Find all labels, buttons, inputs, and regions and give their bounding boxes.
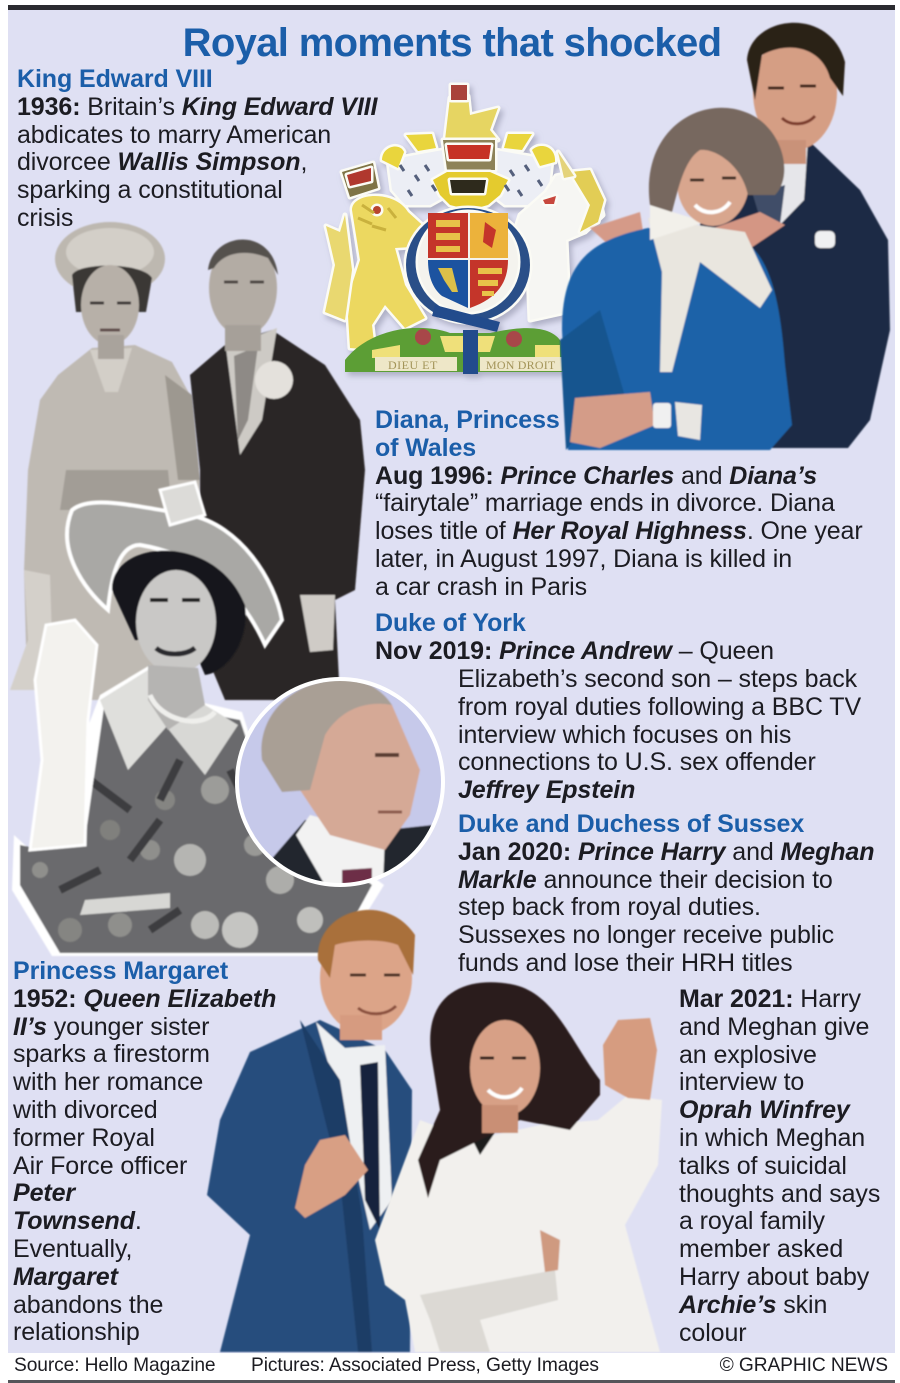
panel: Princess Margaret: former Royal bbox=[13, 1124, 155, 1152]
panel: March 2021 interview: Oprah Winfrey bbox=[679, 1096, 850, 1124]
compartment bbox=[345, 328, 563, 372]
footer: copyright: © GRAPHIC NEWS bbox=[720, 1355, 888, 1376]
panel: Princess Margaret: Peter bbox=[13, 1179, 75, 1207]
top lion bbox=[445, 96, 498, 140]
panel: March 2021 interview: in which Meghan bbox=[679, 1124, 865, 1152]
panel: King Edward VIII: King Edward VIII bbox=[17, 65, 213, 93]
royal crown bbox=[443, 140, 495, 170]
panel: Diana, Princess of Wales: “fairytale” marriage ends in divorce. Diana bbox=[375, 489, 835, 517]
panel: Princess Margaret: Air Force officer bbox=[13, 1152, 187, 1180]
panel: King Edward VIII: abdicates to marry American bbox=[17, 121, 331, 149]
panel: Princess Margaret: with her romance bbox=[13, 1068, 203, 1096]
photo: Princess Margaret bbox=[12, 482, 384, 956]
panel: Princess Margaret: abandons the bbox=[13, 1291, 163, 1319]
panel: Princess Margaret: relationship bbox=[13, 1318, 140, 1346]
photo: Prince Charles and Diana bbox=[560, 23, 890, 450]
panel: March 2021 interview: interview to bbox=[679, 1068, 804, 1096]
panel: Diana, Princess of Wales: Aug 1996: Prince Charles and Diana’s bbox=[375, 462, 817, 490]
panel: March 2021 interview: Archie’s skin bbox=[679, 1291, 827, 1319]
footer: source: Source: Hello Magazine bbox=[14, 1355, 216, 1376]
helm bbox=[433, 172, 508, 210]
panel: Duke of York body: Jeffrey Epstein bbox=[458, 776, 635, 804]
panel: Duke and Duchess of Sussex bbox=[458, 810, 874, 977]
panel: March 2021 interview: colour bbox=[679, 1319, 746, 1347]
panel: Princess Margaret bbox=[13, 957, 276, 1346]
panel: Princess Margaret: Margaret bbox=[13, 1263, 118, 1291]
panel: Duke of York body: interview which focuses on his bbox=[458, 721, 791, 749]
panel: King Edward VIII: sparking a constitutional bbox=[17, 176, 283, 204]
panel: Duke of York heading and lead: Nov 2019: Prince Andrew – Queen bbox=[375, 637, 774, 665]
photo: Meghan Markle bbox=[375, 982, 662, 1352]
panel: Princess Margaret: Townsend. bbox=[13, 1207, 142, 1235]
panel: March 2021 interview: Mar 2021: Harry bbox=[679, 985, 861, 1013]
panel: King Edward VIII: crisis bbox=[17, 204, 73, 232]
top rule bbox=[8, 5, 895, 10]
panel: Duke and Duchess of Sussex: Markle announce their decision to bbox=[458, 866, 833, 894]
panel: Duke and Duchess of Sussex: step back from royal duties. bbox=[458, 893, 761, 921]
panel: Duke and Duchess of Sussex: Jan 2020: Prince Harry and Meghan bbox=[458, 838, 874, 866]
panel: March 2021 interview: an explosive bbox=[679, 1041, 817, 1069]
icon: royal coat of arms: DIEU ET bbox=[388, 358, 438, 372]
panel: Princess Margaret: Princess Margaret bbox=[13, 957, 228, 985]
panel: Princess Margaret: 1952: Queen Elizabeth bbox=[13, 985, 276, 1013]
motto ribbon bbox=[375, 357, 457, 371]
panel: Duke of York body: from royal duties following a BBC TV bbox=[458, 693, 861, 721]
title: Royal moments that shocked bbox=[183, 21, 721, 65]
panel: Princess Margaret: II’s younger sister bbox=[13, 1013, 209, 1041]
photo: Prince Andrew portrait bbox=[235, 677, 450, 890]
panel: Diana, Princess of Wales: a car crash in Paris bbox=[375, 573, 587, 601]
panel: Duke of York body: Elizabeth’s second son – steps back bbox=[458, 665, 857, 693]
panel: March 2021 interview: a royal family bbox=[679, 1207, 825, 1235]
panel: Diana, Princess of Wales: of Wales bbox=[375, 434, 476, 462]
panel: Duke and Duchess of Sussex: Sussexes no longer receive public bbox=[458, 921, 834, 949]
lion supporter bbox=[347, 196, 430, 350]
panel: Duke of York heading and lead: Duke of York bbox=[375, 609, 526, 637]
panel: Diana, Princess of Wales: loses title of Her Royal Highness. One year bbox=[375, 517, 863, 545]
bottom rule bbox=[8, 1380, 895, 1383]
photo: Prince Harry bbox=[207, 910, 415, 1352]
icon: royal coat of arms bbox=[325, 85, 604, 374]
panel: Princess Margaret: Eventually, bbox=[13, 1235, 132, 1263]
panel: March 2021 interview: and Meghan give bbox=[679, 1013, 869, 1041]
footer: pictures credit: Pictures: Associated Press, Getty Images bbox=[251, 1355, 599, 1376]
panel: Diana, Princess of Wales: later, in August 1997, Diana is killed in bbox=[375, 545, 792, 573]
panel: March 2021 interview bbox=[678, 985, 880, 1347]
panel: March 2021 interview: thoughts and says bbox=[679, 1180, 880, 1208]
panel: Duke of York heading and lead bbox=[375, 609, 774, 665]
icon: royal coat of arms: MON DROIT bbox=[486, 358, 556, 372]
panel: Diana, Princess of Wales bbox=[375, 406, 863, 601]
panel: Duke of York body: connections to U.S. sex offender bbox=[458, 748, 816, 776]
panel: March 2021 interview: Harry about baby bbox=[679, 1263, 869, 1291]
panel: Princess Margaret: with divorced bbox=[13, 1096, 158, 1124]
panel: Princess Margaret: sparks a firestorm bbox=[13, 1040, 210, 1068]
panel: Duke and Duchess of Sussex: funds and lose their HRH titles bbox=[458, 949, 793, 977]
panel: King Edward VIII: divorcee Wallis Simpson, bbox=[17, 148, 307, 176]
panel: March 2021 interview: member asked bbox=[679, 1235, 843, 1263]
mantling bbox=[325, 85, 604, 350]
panel: King Edward VIII bbox=[17, 65, 378, 232]
panel: Duke of York body bbox=[458, 665, 861, 804]
photo: Wallis Simpson bbox=[10, 222, 200, 700]
garter ring and shield bbox=[406, 208, 530, 322]
panel: Duke and Duchess of Sussex: Duke and Duchess of Sussex bbox=[458, 810, 804, 838]
unicorn supporter bbox=[512, 172, 603, 320]
panel: Diana, Princess of Wales: Diana, Princess bbox=[375, 406, 560, 434]
panel: March 2021 interview: talks of suicidal bbox=[679, 1152, 847, 1180]
panel: King Edward VIII: 1936: Britain’s King Edward VIII bbox=[17, 93, 377, 121]
photo: King Edward VIII bbox=[190, 239, 365, 700]
